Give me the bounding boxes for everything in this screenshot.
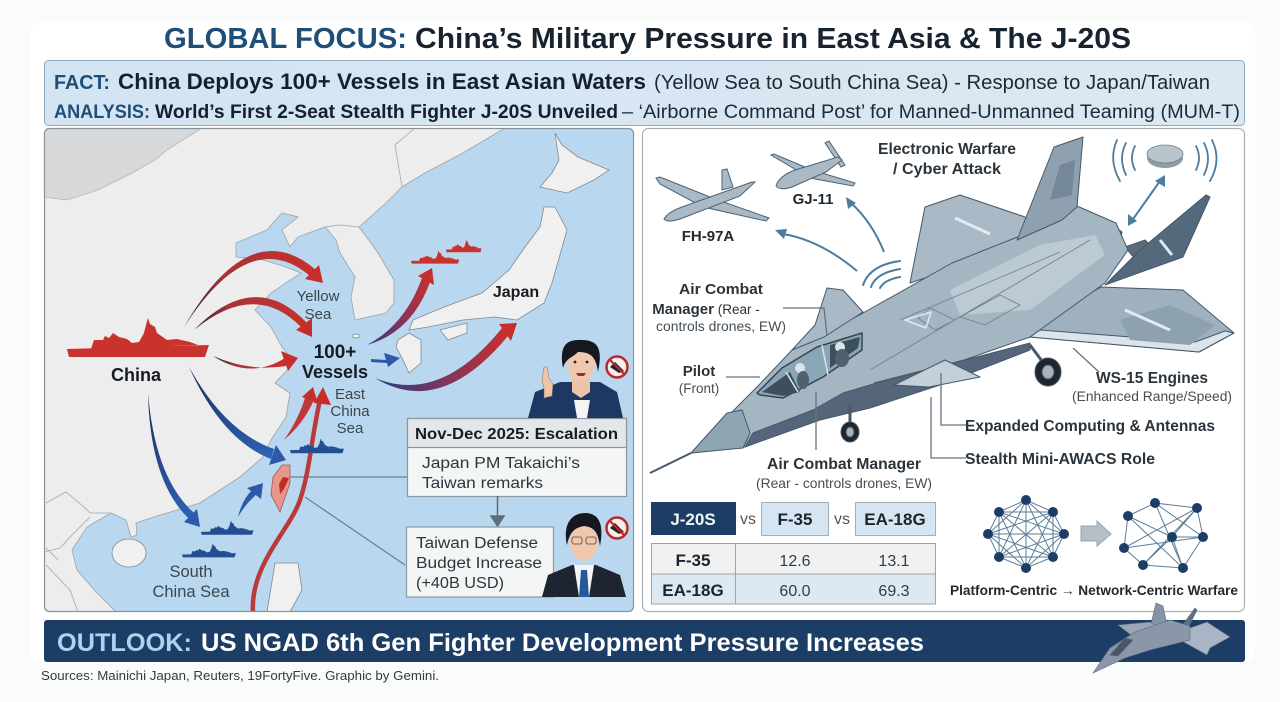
fact line: (Yellow Sea to South China Sea) - Response to Japan/Taiwan [654,72,1210,94]
comparison header: F-35 [778,510,812,529]
callout: escalation: Taiwan remarks [422,475,543,492]
diagram: network-centric network [1119,498,1208,573]
land: northern grey region [44,128,202,200]
map labels: China Sea [152,583,230,601]
fuselage [691,203,1128,453]
comparison header: J-20S [670,510,716,529]
arrows to japan waters [367,278,430,345]
sources: Sources: Mainichi Japan, Reuters, 19FortyFive. Graphic by Gemini. [41,668,439,683]
icon: no symbol two [606,518,628,538]
fact line: FACT: [54,72,110,94]
fact line [54,69,1210,94]
label: air combat manager lower [756,456,932,491]
camouflage patches [950,235,1105,315]
borders [44,128,415,612]
comparison table: F-35 [676,551,710,570]
map labels: China [111,365,162,385]
header panel: fact and analysis [44,60,1244,126]
comparison table: 69.3 [878,583,910,600]
fact line: China Deploys 100+ Vessels in East Asian Waters [118,69,646,94]
map labels: Vessels [302,362,368,382]
nose cone [691,410,750,453]
arrow: remarks to budget [491,496,504,526]
red arrows through the taiwan strait [284,398,313,440]
comparison table: 12.6 [779,553,811,570]
map labels [111,284,539,601]
icon: signal waves [863,261,900,288]
nose probe [650,453,691,473]
label: pilot: Pilot [683,363,715,380]
label: air combat manager upper [652,281,786,334]
analysis line: ANALYSIS: [54,102,150,123]
drone labels: GJ-11 [793,191,833,208]
label: ws-15 engines [1072,370,1232,404]
illustration: j-20s jet [650,137,1234,473]
map labels: East [335,386,366,403]
upper wing [910,195,1040,283]
icon: fh-97a drone [656,169,769,221]
diagram: platform-centric network [983,495,1069,573]
panel lines [870,240,1090,370]
map labels: China [330,403,370,420]
drone labels [682,191,833,245]
label: electronic warfare: / Cyber Attack [893,161,1001,178]
callout: taiwan budget: Taiwan Defense [416,535,538,552]
label: air combat manager upper: controls drones, EW) [656,319,786,334]
map labels: Japan [493,284,539,301]
title: China’s Military Pressure in East Asia & The J-20S [415,23,1131,55]
comparison table: 13.1 [878,553,910,570]
label: air combat manager upper: Air Combat [679,281,763,298]
ships [67,239,482,357]
callout: taiwan budget: Budget Increase [416,555,542,572]
analysis line: World’s First 2-Seat Stealth Fighter J-20S Unveiled [155,102,618,123]
icon: japan pm portrait [528,340,623,418]
analysis line: – ‘Airborne Command Post’ for Manned-Unmanned Teaming (MUM-T) [622,102,1240,123]
callout: escalation [408,418,626,496]
label: electronic warfare: Electronic Warfare [878,141,1016,158]
icon: gj-11 drone [771,141,855,189]
vertical tail one [1017,137,1083,240]
analysis line [54,102,1240,123]
label: ws-15 engines: (Enhanced Range/Speed) [1072,388,1232,404]
lower intake shadow [745,343,1030,447]
map labels: South [169,563,213,581]
map labels: 100+ [314,342,356,363]
label: pilot [679,363,719,396]
blue arrows [148,353,400,527]
comparison header: EA-18G [864,510,926,529]
comparison header: vs [834,511,850,528]
icon: no symbol one [606,356,628,378]
callout: taiwan budget: (+40B USD) [416,575,504,592]
panel: east asia map [44,128,634,612]
callout connector lines [290,477,407,565]
callout lines [726,308,1099,458]
label: expanded computing: Expanded Computing & Antennas [965,418,1215,435]
comparison header [651,502,936,536]
lower wing [992,287,1234,352]
icon: ngad fighter [1093,603,1230,673]
comparison table: EA-18G [662,581,724,600]
landing gear [850,345,1045,425]
outlook banner: US NGAD 6th Gen Fighter Development Pressure Increases [201,629,924,657]
callout: escalation: Nov-Dec 2025: Escalation [415,426,618,443]
label: air combat manager lower: (Rear - controls drones, EW) [756,475,932,491]
comparison header: vs [740,511,756,528]
callout: escalation: Japan PM Takaichi’s [422,455,580,472]
canopy [757,333,862,398]
comparison table: 60.0 [779,583,811,600]
label: electronic warfare [878,141,1016,178]
label: air combat manager upper: Manager (Rear - [652,301,760,318]
network caption: Platform-Centric → Network-Centric Warfare [950,583,1238,598]
callout: taiwan budget [406,527,554,597]
icon: taiwan official portrait [542,513,626,597]
red arrows to the yellow sea [184,251,316,369]
label: air combat manager lower: Air Combat Manager [767,456,921,473]
engine nozzles [1090,222,1122,250]
vertical tail two [1105,195,1210,285]
land: japan [112,133,609,612]
land: taiwan [271,465,290,512]
map labels: Sea [305,306,332,323]
arrows: jet to drones [783,181,1160,271]
panel: j-20s aircraft and comparison [642,128,1244,612]
label: ws-15 engines: WS-15 Engines [1096,370,1208,387]
outlook banner [44,620,1245,662]
label: pilot: (Front) [679,381,719,396]
title: GLOBAL FOCUS: [164,23,407,55]
canard [792,288,863,350]
map labels: Sea [337,420,364,437]
land: mainland asia and korea [44,128,505,612]
insignia [955,218,1172,330]
icon: satellite disc with signals [1113,140,1217,181]
label: stealth mini-awacs: Stealth Mini-AWACS Role [965,451,1155,468]
comparison table [652,544,936,604]
outlook banner: OUTLOOK: [57,629,192,657]
arrow: transition [1081,521,1111,546]
map labels: Yellow [297,288,340,305]
drone labels: FH-97A [682,228,734,245]
